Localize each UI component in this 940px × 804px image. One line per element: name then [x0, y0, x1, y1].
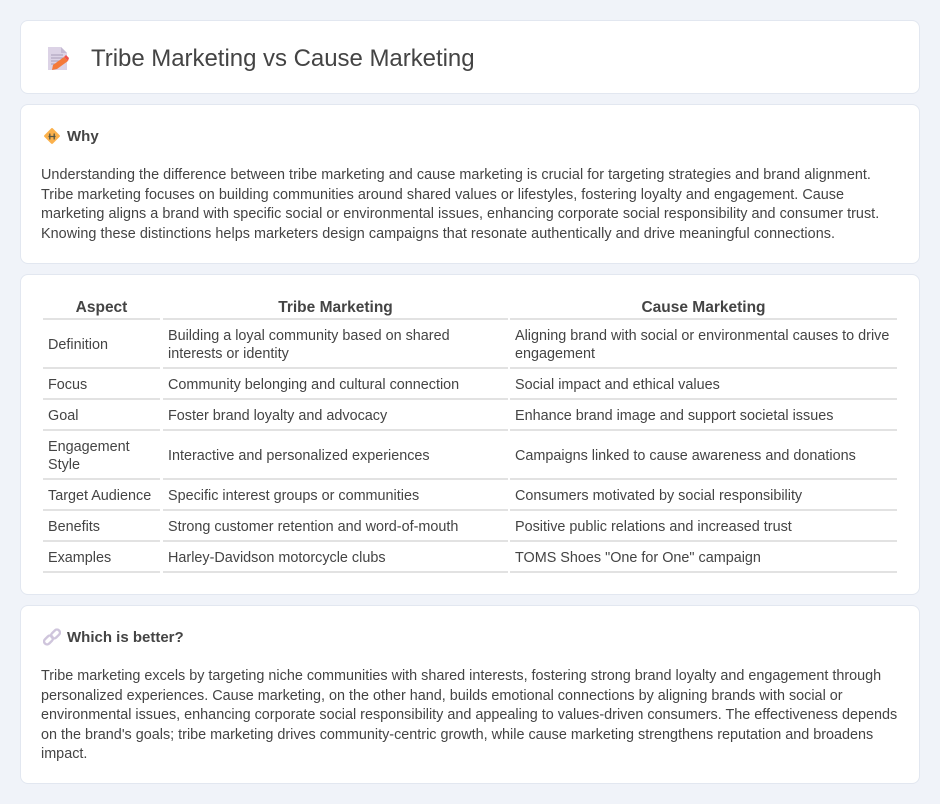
- text block: which is better: Tribe marketing excels by targeting niche communities with shared interests, fostering strong brand loyalty and engagement through: [41, 668, 881, 684]
- icon: chain link: [43, 628, 61, 646]
- text: Building a loyal community based on shared: [168, 328, 450, 344]
- text block: which is better: personalized experiences. Cause marketing, on the other hand, builds emotional connections by aligning brands with social or: [41, 688, 843, 704]
- text: Aligning brand with social or environmental causes to drive: [515, 328, 889, 344]
- text: Community belonging and cultural connection: [168, 377, 459, 393]
- heading: why: Why: [67, 128, 99, 145]
- text block: which is better: [41, 668, 897, 762]
- text: Goal: [48, 408, 78, 424]
- text: Examples: [48, 550, 111, 566]
- text: TOMS Shoes "One for One" campaign: [515, 550, 761, 566]
- text: Style: [48, 457, 80, 473]
- text: Focus: [48, 377, 87, 393]
- text block: why: marketing aligns a brand with specific social or environmental issues, enhancing corporate social responsibility and consumer trust.: [41, 206, 879, 222]
- comparison table: Aspect: [76, 299, 127, 316]
- icon: warning diamond: [44, 128, 60, 144]
- text block: why: Understanding the difference between tribe marketing and cause marketing is crucial for targeting strategies and brand alignment.: [41, 167, 871, 183]
- text: Target Audience: [48, 488, 151, 504]
- comparison table: Cause Marketing: [641, 299, 766, 316]
- text: engagement: [515, 346, 595, 362]
- text: Harley-Davidson motorcycle clubs: [168, 550, 386, 566]
- panel: comparison table: [20, 274, 920, 595]
- text block: which is better: impact.: [41, 746, 87, 762]
- text block: which is better: environmental issues, enhancing corporate social responsibility and appealing to values-driven consumers. The effectiveness depends: [41, 707, 897, 723]
- text: Foster brand loyalty and advocacy: [168, 408, 387, 424]
- text: Campaigns linked to cause awareness and donations: [515, 448, 856, 464]
- comparison table: [76, 299, 766, 316]
- text block: why: Tribe marketing focuses on building communities around shared values or lifestyles, fostering loyalty and engagement. Cause: [41, 186, 844, 202]
- text: Positive public relations and increased trust: [515, 519, 792, 535]
- text: Strong customer retention and word-of-mouth: [168, 519, 458, 535]
- panel: which is better: [20, 605, 920, 784]
- text: Enhance brand image and support societal issues: [515, 408, 833, 424]
- comparison table: Tribe Marketing: [278, 299, 393, 316]
- panel: why: [20, 104, 920, 264]
- text: Definition: [48, 337, 108, 353]
- text: Specific interest groups or communities: [168, 488, 419, 504]
- text block: why: [41, 167, 879, 242]
- title: Tribe Marketing vs Cause Marketing: [91, 45, 475, 72]
- text: Interactive and personalized experiences: [168, 448, 430, 464]
- text: interests or identity: [168, 346, 289, 362]
- panel: title: [20, 20, 920, 94]
- text: Engagement: [48, 439, 130, 455]
- icon: document with pencil: [48, 47, 69, 70]
- text: Social impact and ethical values: [515, 377, 720, 393]
- text: Consumers motivated by social responsibility: [515, 488, 802, 504]
- heading: which is better: Which is better?: [67, 629, 184, 646]
- text block: why: Knowing these distinctions helps marketers design campaigns that resonate authentically and drive meaningful connections.: [41, 226, 835, 242]
- text block: which is better: on the brand's goals; tribe marketing drives community-centric growth, while cause marketing strengthens reputation and broadens: [41, 726, 873, 742]
- text: Benefits: [48, 519, 100, 535]
